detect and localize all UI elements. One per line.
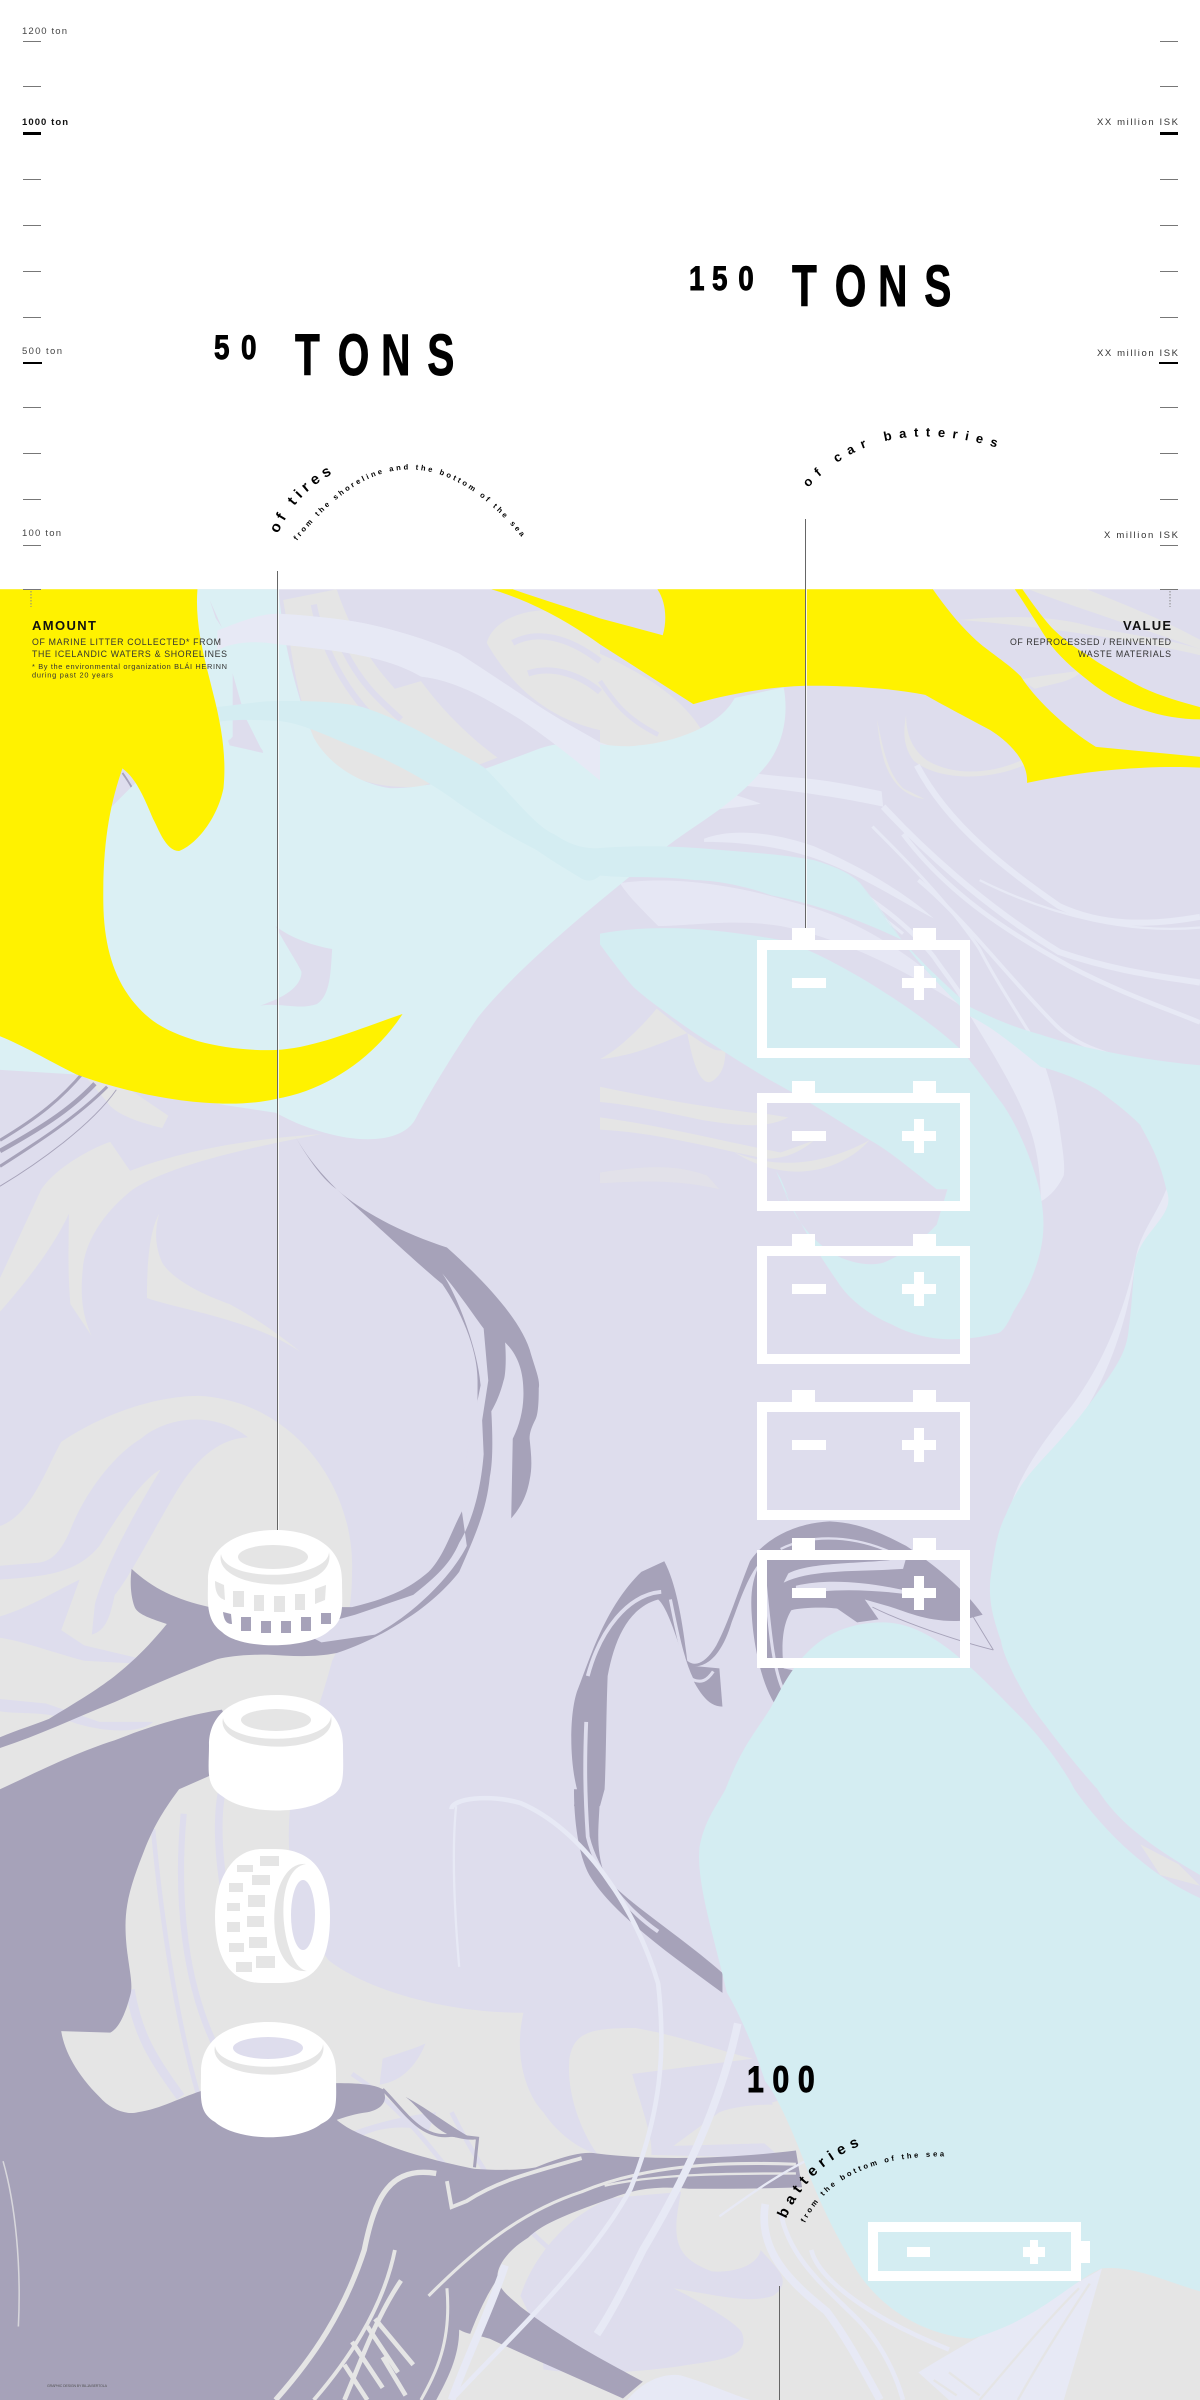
credit: GRAPHIC DESIGN BY BILJA BERTOLA (47, 2384, 108, 2388)
icon: battery 4 (762, 1390, 965, 1515)
curved caption: of tires: of tires (272, 468, 331, 532)
connector line: small batteries (779, 2286, 780, 2400)
curved caption: batteries from the bottom of the sea: batteries (776, 2140, 858, 2218)
heading: 50 tons of tires: 50 (214, 328, 257, 367)
pale marbling (217, 614, 1200, 2400)
aqua middle shape (600, 928, 1043, 1339)
aqua lower main (699, 1622, 1200, 2339)
heading: 50 tons of tires (214, 323, 454, 388)
aqua right mass (860, 883, 1200, 1875)
curved caption: of tires: from the shoreline and the bottom of the sea (294, 464, 524, 540)
value scale ruler: XX million ISK (1097, 348, 1179, 359)
curved caption: batteries from the bottom of the sea: from the bottom of the sea (800, 2152, 944, 2222)
amount scale ruler: 500 ton (22, 346, 62, 357)
pale streak inside right channel (1140, 1844, 1200, 1886)
icon: battery 1 (762, 928, 965, 1053)
car battery stack (762, 928, 965, 1663)
connector line: car batteries (805, 519, 807, 928)
amount scale ruler: 1000 ton (22, 117, 68, 128)
value legend text: OF REPROCESSED / REINVENTED (1010, 637, 1171, 647)
yellow left (0, 589, 403, 1104)
dark marbling (0, 773, 993, 2400)
gray streaks on dark (3, 2158, 796, 2400)
heading: 100 batteries: 100 (747, 2059, 815, 2101)
amount legend text: AMOUNT (32, 618, 96, 633)
aqua left area (0, 589, 786, 1139)
lavender inside aqua (260, 926, 332, 1007)
marbled background (0, 589, 1200, 2400)
value scale ruler: X million ISK (1104, 530, 1179, 541)
icon: tire 4 (201, 2022, 336, 2137)
aqua band (216, 701, 902, 940)
icon: tire 2 (209, 1695, 343, 1811)
heading: 150 tons of car batteries (689, 254, 951, 319)
icon: battery 3 (762, 1234, 965, 1359)
value legend text: WASTE MATERIALS (1078, 649, 1171, 659)
heading: 150 tons of car batteries: 150 (689, 259, 754, 298)
amount legend text: OF MARINE LITTER COLLECTED* FROM (32, 637, 221, 647)
amount legend text: during past 20 years (32, 670, 113, 680)
connector line: tires (277, 571, 279, 1530)
amount legend text: * By the environmental organization BLÁI HERINN (32, 662, 227, 671)
yellow top middle (491, 589, 1200, 783)
icon: tire 3 (215, 1849, 330, 1983)
value legend text (1010, 618, 1171, 659)
amount legend text: THE ICELANDIC WATERS & SHORELINES (32, 649, 227, 659)
amount scale ruler: 1200 ton (22, 26, 67, 37)
gray marbling (0, 589, 1200, 2400)
amount scale ruler (22, 26, 68, 607)
heading: 50 tons of tires: TONS (295, 323, 454, 388)
amount scale ruler: 100 ton (22, 528, 61, 539)
icon: tire 1 (208, 1530, 342, 1645)
tire stack (201, 1530, 343, 2137)
yellow top right (1015, 589, 1200, 719)
value legend text: VALUE (1123, 618, 1171, 633)
icon: small battery (873, 2227, 1090, 2276)
icon: battery 5 (762, 1538, 965, 1663)
curved caption: of car batteries: of car batteries (804, 428, 998, 486)
amount legend text (32, 618, 227, 680)
value scale ruler (1097, 41, 1179, 607)
white header area (0, 0, 1200, 589)
pale band over aqua left (217, 614, 600, 781)
value scale ruler: XX million ISK (1097, 117, 1179, 128)
heading: 150 tons of car batteries: TONS (792, 254, 951, 319)
icon: battery 2 (762, 1081, 965, 1206)
lavender marbling (0, 1290, 1200, 2373)
